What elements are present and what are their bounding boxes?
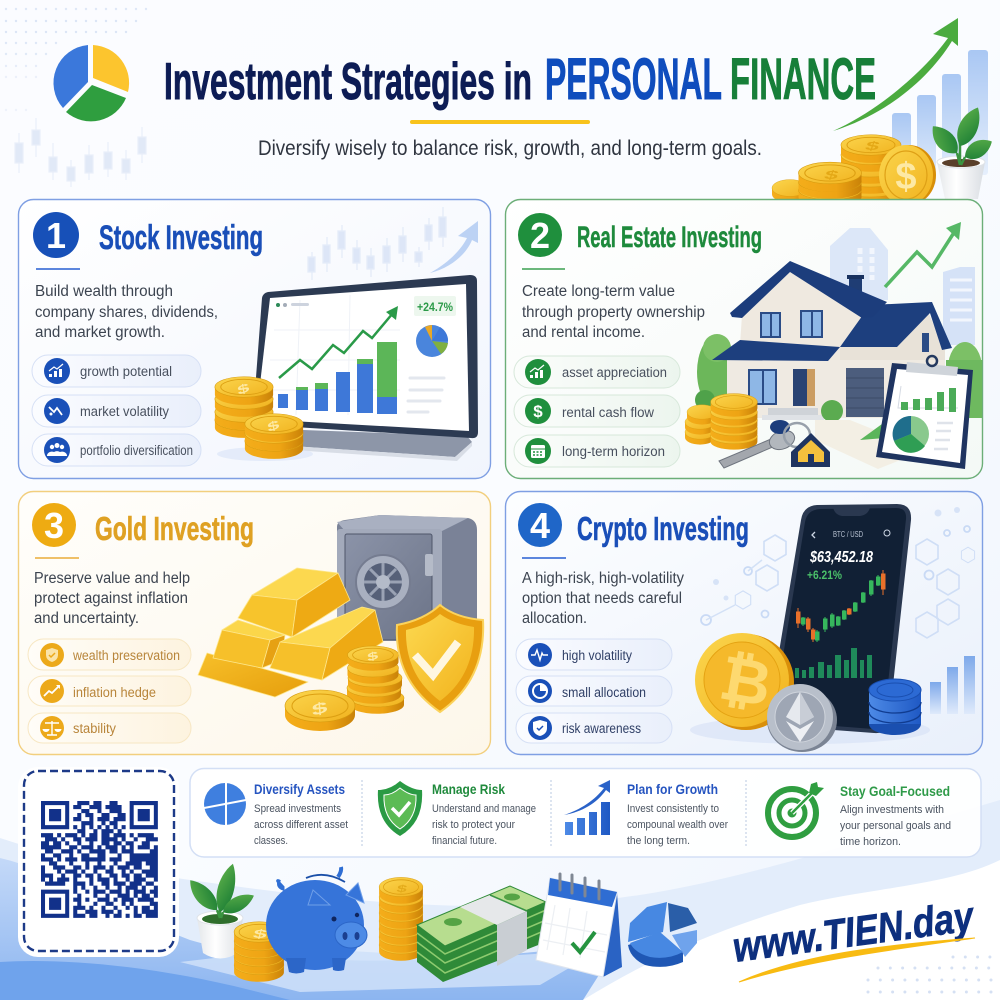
pill: growth potential: growth potential xyxy=(80,364,172,379)
heading rule xyxy=(522,557,566,559)
pill: inflation hedge xyxy=(28,676,191,706)
principle: plan for growth: compounal wealth over xyxy=(627,819,728,831)
illustration: ethereum coin xyxy=(767,684,837,752)
heading rule xyxy=(522,268,565,270)
illustration: coin stacks: $ xyxy=(266,417,280,435)
number badge 2 xyxy=(518,213,562,257)
illustration: coin stacks xyxy=(215,377,313,461)
illustration: gold coins xyxy=(285,646,404,731)
description: through property ownership xyxy=(522,304,705,321)
illustration: blue coin stack xyxy=(869,679,921,735)
pill: stability xyxy=(28,713,191,743)
principle: stay goal-focused: time horizon. xyxy=(840,836,901,848)
number badge 4 xyxy=(518,503,562,547)
illustration: gold coins: $ xyxy=(311,698,328,719)
title underline xyxy=(410,120,590,124)
principle: plan for growth xyxy=(564,780,728,847)
pill: risk awareness xyxy=(516,713,672,743)
illustration: potted plant xyxy=(184,862,257,958)
illustration: phone with trading chart: $63,452.18 xyxy=(809,549,873,566)
principle: stay goal-focused: your personal goals and xyxy=(840,820,951,832)
pill: wealth preservation xyxy=(28,639,191,670)
pill: high volatility: high volatility xyxy=(562,648,632,663)
pill: small allocation xyxy=(516,676,672,706)
illustration: piggy bank xyxy=(266,867,367,974)
description: and uncertainty. xyxy=(34,610,139,627)
icon: growth bars xyxy=(564,780,610,835)
panel: QR code xyxy=(18,767,179,957)
pill: asset appreciation: asset appreciation xyxy=(562,365,667,380)
number badge 1 xyxy=(33,212,79,258)
icon: header pie chart xyxy=(53,45,129,121)
pill: asset appreciation xyxy=(514,356,680,388)
decorative bottom waves xyxy=(0,800,1000,1000)
description xyxy=(522,283,705,341)
principle: manage risk: financial future. xyxy=(432,835,497,847)
illustration: phone with trading chart: +6.21% xyxy=(807,570,842,582)
principle: manage risk: risk to protect your xyxy=(432,819,515,831)
principle: plan for growth: Plan for Growth xyxy=(627,781,718,797)
description: allocation. xyxy=(522,610,587,627)
header illustration: growth arrow, bars, coins and plant: $ xyxy=(822,168,841,182)
pill: wealth preservation: wealth preservation xyxy=(72,648,180,663)
illustration: 3D pie chart xyxy=(628,902,697,967)
description: and rental income. xyxy=(522,324,645,341)
principle: diversify assets xyxy=(204,781,349,847)
decorative top-left dots xyxy=(6,9,150,110)
illustration: coin stack beside plant xyxy=(234,922,284,982)
decorative candlesticks and arrow xyxy=(308,207,478,280)
illustration: phone with trading chart: BTC / USD xyxy=(833,530,863,539)
pill: growth potential xyxy=(32,355,201,387)
title: FINANCE xyxy=(730,47,876,112)
number badge 1: 1 xyxy=(46,215,66,256)
principle: plan for growth: the long term. xyxy=(627,835,690,847)
panel: stock investing xyxy=(18,200,490,478)
panel: gold investing xyxy=(18,492,490,754)
principle: diversify assets: Diversify Assets xyxy=(254,781,345,797)
number badge 3 xyxy=(32,503,76,547)
icon: pie xyxy=(204,783,246,825)
number badge 3: 3 xyxy=(44,505,64,546)
pill: rental cash flow: rental cash flow xyxy=(562,405,654,420)
decorative city and arrow xyxy=(830,222,975,345)
heading: stock investing: Stock Investing xyxy=(99,219,263,257)
pill: market volatility xyxy=(32,395,201,427)
principle: diversify assets: Spread investments xyxy=(254,803,341,815)
pill: long-term horizon xyxy=(514,435,680,467)
illustration: calendar with check xyxy=(536,874,622,977)
pill: rental cash flow xyxy=(514,395,680,427)
illustration: clipboard xyxy=(876,356,973,469)
panel: key principles xyxy=(190,768,981,857)
illustration: gold coins: $ xyxy=(367,649,379,664)
pill: stability: stability xyxy=(73,721,116,736)
principle: plan for growth: Invest consistently to xyxy=(627,803,719,815)
icon: shield with checkmark xyxy=(397,605,483,712)
illustration: gold bars xyxy=(198,568,383,697)
pill: inflation hedge: inflation hedge xyxy=(73,685,156,700)
description: A high-risk, high-volatility xyxy=(522,570,684,587)
principle: manage risk: Understand and manage xyxy=(432,803,536,815)
description xyxy=(35,283,218,341)
decorative header candlesticks xyxy=(15,118,146,187)
panel: real estate investing xyxy=(506,200,982,478)
decorative bottom-right dots xyxy=(868,957,995,992)
description: option that needs careful xyxy=(522,590,682,607)
illustration: coin stack beside plant: $ xyxy=(251,928,269,941)
illustration: tall coin stack: $ xyxy=(395,884,408,895)
heading rule xyxy=(36,268,80,270)
number badge 4: 4 xyxy=(530,505,550,546)
principle: diversify assets: classes. xyxy=(254,835,288,847)
heading: gold investing: Gold Investing xyxy=(95,510,254,547)
header illustration: growth arrow, bars, coins and plant xyxy=(772,18,996,207)
heading rule xyxy=(35,557,79,559)
description: Create long-term value xyxy=(522,283,675,300)
pill: rental cash flow: $ xyxy=(533,402,543,421)
principle: manage risk xyxy=(378,781,536,847)
description: and market growth. xyxy=(35,324,165,341)
illustration: bitcoin coin xyxy=(695,633,794,730)
pill: long-term horizon: long-term horizon xyxy=(562,444,665,459)
principle: stay goal-focused: Align investments with xyxy=(840,804,944,816)
number badge 2: 2 xyxy=(530,215,550,256)
illustration: laptop with chart: +24.7% xyxy=(417,300,453,314)
illustration: cash bundle xyxy=(417,886,546,982)
heading: real estate investing: Real Estate Investing xyxy=(577,221,762,254)
illustration: phone with trading chart xyxy=(690,504,930,744)
illustration: house xyxy=(695,261,982,469)
pill: risk awareness: risk awareness xyxy=(562,721,641,736)
description: company shares, dividends, xyxy=(35,304,218,321)
principle: diversify assets: across different asset xyxy=(254,819,349,831)
QR modules xyxy=(41,803,158,916)
illustration: coins and keys xyxy=(685,394,830,468)
subtitle: Diversify wisely to balance risk, growth, and long-term goals. xyxy=(258,137,762,160)
header illustration: growth arrow, bars, coins and plant: $ xyxy=(895,156,917,198)
description xyxy=(522,570,684,627)
principle: manage risk: Manage Risk xyxy=(432,781,505,797)
principle: stay goal-focused: Stay Goal-Focused xyxy=(840,783,950,799)
title: Investment Strategies in xyxy=(164,53,532,111)
decorative bars xyxy=(930,656,975,714)
pill: portfolio diversification xyxy=(32,434,201,466)
pill: portfolio diversification: portfolio diversification xyxy=(80,443,193,458)
description: Preserve value and help xyxy=(34,570,190,587)
description: protect against inflation xyxy=(34,590,188,607)
description xyxy=(34,570,190,627)
swoosh xyxy=(739,938,975,982)
icon: target xyxy=(768,782,824,837)
illustration: tall coin stack xyxy=(379,877,423,961)
heading: crypto investing: Crypto Investing xyxy=(577,510,749,547)
decorative molecules xyxy=(701,507,975,638)
pill: market volatility: market volatility xyxy=(80,404,169,419)
illustration: bitcoin coin: ₿ xyxy=(715,640,777,721)
icon: shield check xyxy=(378,781,422,836)
illustration: laptop with chart xyxy=(253,275,478,461)
illustration: safe xyxy=(337,515,477,641)
header illustration: growth arrow, bars, coins and plant: $ xyxy=(863,139,882,153)
principle: stay goal-focused xyxy=(768,782,951,848)
description: Build wealth through xyxy=(35,283,173,300)
pill: small allocation: small allocation xyxy=(562,685,646,700)
pill: high volatility xyxy=(516,639,672,670)
title: PERSONAL xyxy=(545,47,722,112)
panel: crypto investing xyxy=(506,492,982,754)
illustration: coin stacks: $ xyxy=(236,380,250,398)
